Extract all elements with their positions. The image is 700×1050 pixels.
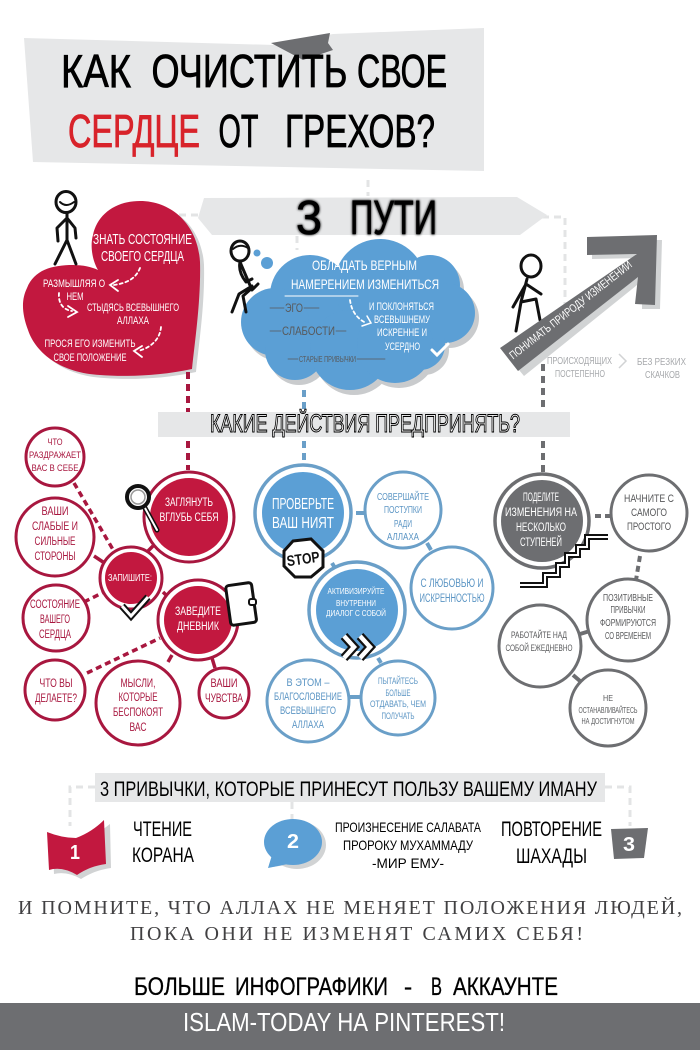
circle: inner dialogue: ДИАЛОГ С СОБОЙ [326, 607, 386, 618]
heading: 3 paths [198, 192, 547, 245]
circle: give more: ОТДАВАТЬ, ЧЕМ [370, 699, 426, 710]
circle: start simple [611, 475, 687, 551]
more infographics line: - [404, 973, 412, 1001]
circle: keep a diary: ЗАВЕДИТЕ [175, 606, 221, 618]
circle: thoughts: ВАС [130, 722, 146, 734]
circle: state of heart: СОСТОЯНИЕ [30, 599, 80, 611]
circle: thoughts: КОТОРЫЕ [118, 692, 158, 704]
circle: inner dialogue: АКТИВИЗИРУЙТЕ [328, 585, 385, 596]
band: 3 habits [95, 773, 605, 802]
circle: look inside: ЗАГЛЯНУТЬ [165, 497, 213, 509]
circle: start simple: НАЧНИТЕ С [624, 493, 674, 505]
circle: blessing: АЛЛАХА [292, 719, 324, 731]
circle: blessing: В ЭТОМ – [286, 677, 330, 689]
habit 3: grey tag icon [611, 828, 648, 859]
circle: check your intention: ВАШ НИЯТ [272, 515, 334, 532]
circle: what irritates: ЧТО [48, 437, 62, 448]
habit 3: label: ШАХАДЫ [516, 845, 587, 868]
habit 3: label: ПОВТОРЕНИЕ [501, 818, 602, 841]
circle: positive habits: ПРИВЫЧКИ [610, 605, 646, 616]
heart text: СВОЕ ПОЛОЖЕНИЕ [54, 352, 126, 364]
more infographics line [134, 973, 558, 1001]
icon: check mark [122, 597, 148, 616]
heading: 3 paths: ПУТИ [350, 192, 437, 245]
circle: do deeds for Allah: РАДИ [394, 519, 412, 530]
heart text: СВОЕГО СЕРДЦА [101, 248, 184, 265]
circle: do not stop: НА ДОСТИГНУТОМ [582, 717, 635, 726]
habit 3: grey tag icon: 3 [623, 834, 635, 856]
blue circle links [332, 513, 431, 697]
arrow side note: ПРОИСХОДЯЩИХ [547, 356, 612, 367]
habit 2: label [335, 819, 481, 871]
circle: divide into steps: НЕСКОЛЬКО [516, 522, 566, 534]
circle: divide into steps [495, 474, 589, 568]
title banner: ОТ [218, 105, 258, 157]
cloud text [282, 257, 439, 364]
circle: blessing [267, 660, 349, 742]
icon: stairs [520, 537, 608, 585]
circle: with love: С ЛЮБОВЬЮ И [420, 578, 484, 590]
circle: positive habits: ПОЗИТИВНЫЕ [603, 593, 653, 604]
circle: do deeds for Allah: ПОСТУПКИ [384, 505, 422, 516]
habit 2: speech bubble icon: 2 [287, 831, 299, 853]
sitting stick figure [231, 241, 258, 312]
habit 2: label: ПРОИЗНЕСЕНИЕ САЛАВАТА [335, 819, 481, 835]
icon: double chevrons [344, 636, 370, 658]
band: what actions to take [158, 408, 570, 438]
circle: check your intention [255, 465, 351, 561]
circle: give more: ПЫТАЙТЕСЬ [378, 675, 418, 687]
closing quote: ПОКА ОНИ НЕ ИЗМЕНЯТ САМИХ СЕБЯ! [130, 923, 583, 945]
circle: strengths and weaknesses: СТОРОНЫ [34, 551, 76, 563]
circle: state of heart: ВАШЕГО [40, 614, 70, 626]
footer bar: ISLAM-TODAY НА PINTEREST! [183, 1007, 505, 1037]
circle: look inside: ВГЛУБЬ СЕБЯ [160, 512, 218, 524]
cloud text: И ПОКЛОНЯТЬСЯ [369, 301, 434, 313]
circle: do deeds for Allah: АЛЛАХА [387, 532, 419, 543]
heading: 3 paths: ПУТИ [350, 192, 437, 245]
more infographics line: В [431, 973, 442, 1001]
circle: feelings [199, 668, 249, 718]
circle: write down [100, 547, 162, 609]
circle: positive habits: ФОРМИРУЮТСЯ [600, 618, 656, 629]
heading: 3 paths: 3 [296, 192, 322, 245]
circle: inner dialogue [309, 562, 405, 658]
circle: write down: ЗАПИШИТЕ: [108, 573, 152, 584]
icon: stop sign [284, 539, 323, 577]
circle: do not stop [570, 670, 646, 746]
circle: with love: ИСКРЕННОСТЬЮ [420, 593, 485, 605]
circle: state of heart: СЕРДЦА [39, 629, 71, 641]
circle: state of heart [23, 585, 89, 651]
cloud text: ОБЛАДАТЬ ВЕРНЫМ [312, 257, 417, 273]
circle: with love [411, 547, 493, 629]
stick figure on heart [55, 192, 76, 264]
heading: 3 paths: 3 [296, 192, 322, 245]
circle: give more: БОЛЬШЕ [386, 688, 410, 699]
circle: work daily: СОБОЙ ЕЖЕДНЕВНО [506, 642, 572, 654]
habit 1: label: ЧТЕНИЕ [133, 818, 192, 841]
connector dashes from the heading [70, 180, 630, 826]
arrow side note: ПОСТЕПЕННО [555, 369, 605, 380]
circle: feelings: ЧУВСТВА [205, 693, 243, 705]
circle: give more [361, 661, 435, 735]
arrow side note [547, 354, 686, 381]
circle: what you do [25, 660, 85, 720]
circle: strengths and weaknesses: ВАШИ [42, 506, 68, 518]
circle: what irritates: ВАС В СЕБЕ [32, 463, 78, 474]
heart text: СТЫДЯСЬ ВСЕВЫШНЕГО [87, 302, 179, 314]
closing quote: И ПОМНИТЕ, ЧТО АЛЛАХ НЕ МЕНЯЕТ ПОЛОЖЕНИЯ ЛЮДЕЙ, [18, 896, 682, 919]
circle: what irritates [26, 428, 84, 486]
title banner: ОЧИСТИТЬ [152, 45, 348, 97]
circle: blessing: БЛАГОСЛОВЕНИЕ [274, 691, 342, 703]
heart text: НЕМ [66, 291, 84, 303]
habit 1: book icon [47, 820, 111, 879]
cloud lines and check [270, 296, 448, 359]
cloud text: СТАРЫЕ ПРИВЫЧКИ [299, 355, 356, 364]
more infographics line: БОЛЬШЕ [134, 973, 225, 1001]
grey circles [495, 474, 687, 746]
growth arrow: ПОНИМАТЬ ПРИРОДУ ИЗМЕНЕНИЙ [507, 258, 635, 362]
cloud text: ВСЕВЫШНЕМУ [374, 314, 431, 326]
band: what actions to take: КАКИЕ ДЕЙСТВИЯ ПРЕДПРИНЯТЬ? [210, 408, 520, 438]
circle: keep a diary [158, 580, 238, 660]
walking stick figure [513, 255, 541, 331]
circle: feelings: ВАШИ [210, 678, 238, 690]
circle: give more: ПОЛУЧАТЬ [382, 711, 414, 722]
more infographics line: ИНФОГРАФИКИ [235, 973, 388, 1001]
arrow side note: БЕЗ РЕЗКИХ [637, 357, 686, 368]
cloud text: УСЕРДНО [385, 341, 420, 353]
circle: thoughts: МЫСЛИ, [120, 678, 156, 690]
circle: do not stop: ОСТАНАВЛИВАЙТЕСЬ [578, 706, 638, 715]
habit 2: label: ПРОРОКУ МУХАММАДУ [343, 837, 473, 853]
circle: what you do: ЧТО ВЫ [40, 678, 72, 690]
icon: stop sign: STOP [286, 549, 321, 570]
closing quote [18, 896, 682, 945]
circle: divide into steps: ПОДЕЛИТЕ [523, 492, 559, 504]
cloud panel [241, 239, 479, 395]
circle: start simple: ПРОСТОГО [627, 521, 671, 533]
title banner: СВОЕ [357, 45, 447, 97]
grey circle links [573, 516, 640, 681]
circle: positive habits: СО ВРЕМЕНЕМ [605, 631, 651, 642]
heart text: ПРОСЯ ЕГО ИЗМЕНИТЬ [44, 338, 136, 350]
habit 1: book icon: 1 [70, 842, 80, 864]
circle: strengths and weaknesses: СИЛЬНЫЕ [34, 536, 76, 548]
circle: do not stop: НЕ [603, 694, 613, 703]
circle: thoughts: БЕСПОКОЯТ [113, 707, 163, 719]
circle: work daily: РАБОТАЙТЕ НАД [511, 629, 567, 641]
circle: check your intention: ПРОВЕРЬТЕ [272, 496, 334, 513]
circle: what you do: ДЕЛАЕТЕ? [35, 693, 77, 705]
title banner: КАК [61, 45, 131, 97]
circle: look inside [144, 472, 234, 562]
circle: strengths and weaknesses [16, 498, 94, 576]
circle: divide into steps: СТУПЕНЕЙ [520, 536, 562, 549]
habit 3: label [501, 818, 602, 868]
circle: start simple: САМОГО [631, 507, 667, 519]
column connectors [188, 364, 543, 472]
red circle links [74, 483, 215, 673]
arrow side note: СКАЧКОВ [645, 370, 680, 381]
title banner: СЕРДЦЕ [68, 105, 200, 157]
heart text: АЛЛАХА [117, 315, 149, 327]
circle: keep a diary: ДНЕВНИК [177, 621, 219, 633]
circle: divide into steps: ИЗМЕНЕНИЯ НА [505, 507, 577, 519]
cloud text: СЛАБОСТИ [282, 324, 335, 338]
heart dashed arrows [59, 268, 161, 357]
habit 1: label [132, 818, 194, 867]
circle: blessing: ВСЕВЫШНЕГО [280, 705, 336, 717]
circle: inner dialogue: ВНУТРЕННИ [336, 598, 376, 608]
icon: diary [225, 582, 257, 626]
circle: what irritates: РАЗДРАЖАЕТ [29, 450, 81, 461]
icon: magnifier [127, 486, 157, 530]
footer bar [0, 1003, 700, 1050]
circle: do deeds for Allah [365, 472, 441, 548]
red circles [16, 428, 257, 745]
circle: thoughts [96, 661, 180, 745]
title banner [24, 28, 484, 171]
habit 2: speech bubble icon [264, 819, 326, 869]
cloud text: ЭГО [285, 301, 303, 315]
blue circles [255, 465, 493, 742]
heart text: РАЗМЫШЛЯЯ О [43, 278, 105, 290]
heart text: ЗНАТЬ СОСТОЯНИЕ [93, 231, 192, 248]
title banner: ГРЕХОВ? [285, 105, 435, 157]
circle: do deeds for Allah: СОВЕРШАЙТЕ [377, 490, 429, 503]
habit 1: label: КОРАНА [132, 844, 194, 867]
circle: strengths and weaknesses: СЛАБЫЕ И [32, 521, 78, 533]
cloud text: ИСКРЕННЕ И [377, 327, 427, 339]
heart panel [23, 201, 204, 379]
cloud text: НАМЕРЕНИЕМ ИЗМЕНИТЬСЯ [291, 276, 439, 292]
more infographics line: АККАУНТЕ [453, 973, 558, 1001]
habit 2: label: -МИР ЕМУ- [372, 855, 444, 871]
heart text [43, 231, 192, 364]
circle: positive habits [587, 579, 669, 661]
circle: work daily [499, 605, 581, 687]
